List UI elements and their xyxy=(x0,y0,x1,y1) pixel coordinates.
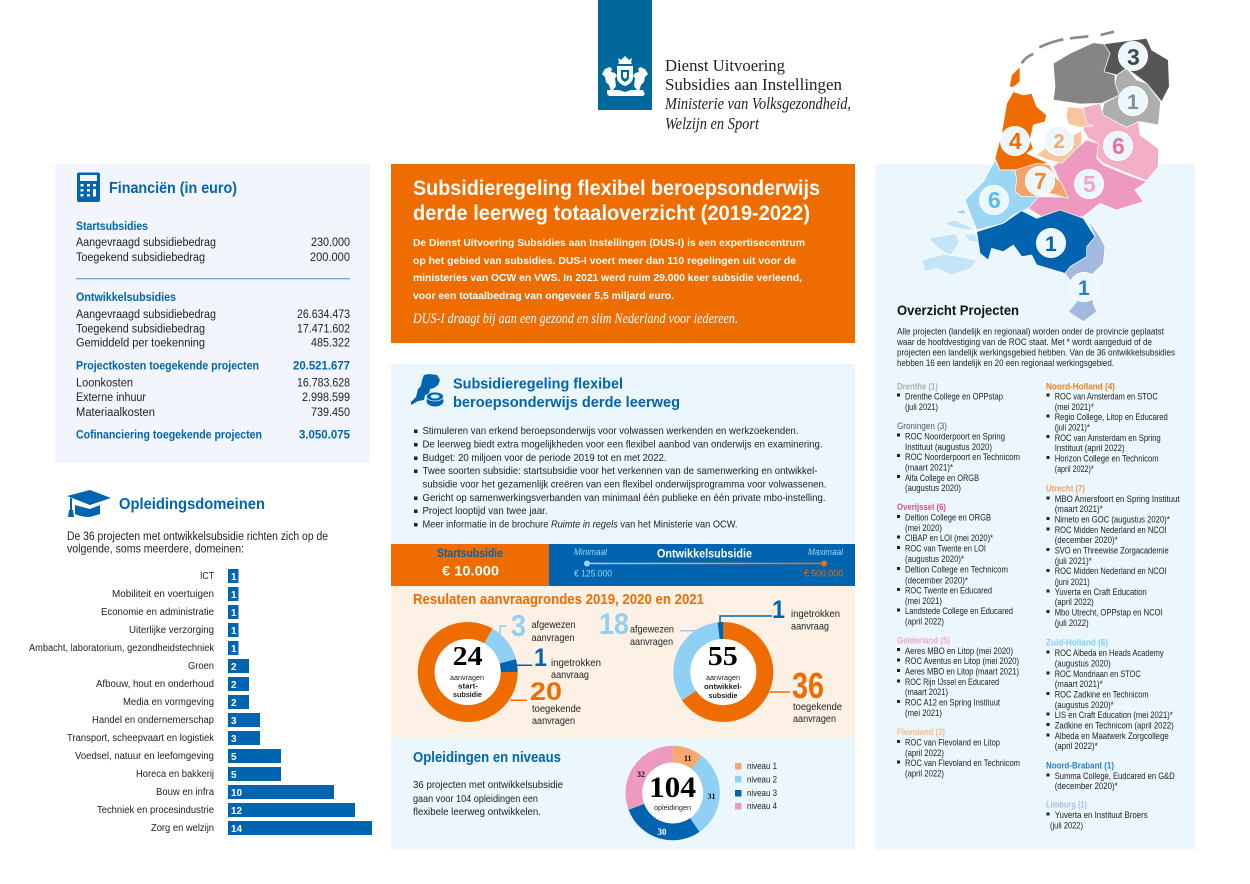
callout: 3 afgewezen: 3 xyxy=(511,608,526,643)
province: Friesland xyxy=(1053,43,1119,104)
project list column 1: Aeres MBO en Litop (mei 2020) xyxy=(905,646,1013,656)
bar chart: 2 xyxy=(231,680,237,691)
project list column 2: (juni 2021) xyxy=(1055,577,1090,587)
bar chart: ICT xyxy=(200,571,214,582)
table: ontwikkelsubsidies: 17.471.602 xyxy=(297,324,350,336)
table: ontwikkelsubsidies: Loonkosten xyxy=(76,378,133,390)
province: Noord-Brabant xyxy=(977,210,1095,273)
callout: 1 ingetrokken: 1 xyxy=(534,644,547,672)
ontwikkelsubsidie range: Ontwikkelsubsidie xyxy=(657,548,752,560)
callout: 18 afgewezen: 18 xyxy=(599,608,629,641)
province: Zuid-Holland xyxy=(955,160,1038,230)
body text xyxy=(413,779,563,818)
project list column 2: (april 2022)* xyxy=(1055,464,1094,474)
project list column 2: (augustus 2020) xyxy=(1055,658,1111,668)
bar chart: 1 xyxy=(231,644,237,655)
project list column 2: Limburg (1) xyxy=(1046,800,1087,810)
bar chart: 5 xyxy=(231,752,237,763)
project list column 1: (augustus 2020)* xyxy=(905,554,964,564)
project list column 2: Regio College, Litop en Educared xyxy=(1055,412,1168,422)
callout: 36 toegekend: 36 xyxy=(792,665,824,706)
callout: 20 toegekend: toegekende xyxy=(532,703,581,715)
project list column 1: (maart 2021) xyxy=(905,687,948,697)
bar chart: Ambacht, laboratorium, gezondheidstechniek xyxy=(29,643,215,654)
table: ontwikkelsubsidies xyxy=(76,292,351,442)
callout: 1 ingetrokken xyxy=(720,596,840,632)
overzicht intro text: projecten een landelijk werkingsgebied hebben. Van de 36 ontwikkelsubsidies xyxy=(897,348,1175,358)
project list column 2: LIS en Craft Education (mei 2021)* xyxy=(1055,710,1173,720)
intro paragraph: De Dienst Uitvoering Subsidies aan Instellingen (DUS-I) is een expertisecentrum xyxy=(413,237,805,249)
project list column 1: Landstede College en Educared xyxy=(905,606,1013,616)
donut: ontwikkelsubsidie: subsidie xyxy=(708,693,738,700)
donut: niveaus: 31 xyxy=(708,792,716,801)
main title: derde leerweg totaaloverzicht (2019-2022) xyxy=(413,201,810,225)
project list column 1: CIBAP en LOI (mei 2020)* xyxy=(905,533,993,543)
callout: 18 afgewezen xyxy=(599,608,697,648)
donut: niveaus: 104 xyxy=(649,771,696,804)
legend: niveau 1 xyxy=(747,761,777,771)
project list column 2: MBO Amersfoort en Spring Instituut xyxy=(1055,494,1180,504)
project list column 2: ROC Midden Nederland en NCOI xyxy=(1055,525,1167,535)
project list column 1: (april 2022) xyxy=(905,616,944,626)
bar chart: Mobiliteit en voertuigen xyxy=(112,589,214,600)
startsubsidie label: € 10.000 xyxy=(442,562,499,578)
bullet list: Gericht op samenwerkingsverbanden van minimaal één publieke en één private mbo-instelling. xyxy=(422,492,826,504)
table: startsubsidies: Aangevraagd subsidiebedrag xyxy=(76,237,216,249)
callout: 3 afgewezen xyxy=(500,608,576,644)
callout: 36 toegekend xyxy=(770,665,842,725)
bar chart: Zorg en welzijn xyxy=(151,823,214,834)
panel: regeling xyxy=(391,364,855,544)
donut: niveaus: 30 xyxy=(658,827,667,837)
bullets column 2 xyxy=(1046,394,1050,816)
project list column 1: Drenthe College en OPPstap xyxy=(905,392,1003,402)
table: startsubsidies xyxy=(76,221,350,264)
bullet list: De leerweg biedt extra mogelijkheden voor een flexibel aanbod van onderwijs en examinering. xyxy=(422,438,822,450)
bar chart: 5 xyxy=(231,770,237,781)
bar chart: 1 xyxy=(231,608,237,619)
callout: 18 afgewezen: afgewezen xyxy=(630,624,674,636)
donut: ontwikkelsubsidie: ontwikkel- xyxy=(704,684,743,691)
bar chart: 3 xyxy=(231,716,237,727)
bar chart: Media en vormgeving xyxy=(123,697,214,708)
project list column 2: (juli 2022) xyxy=(1055,618,1089,628)
callout: 1 ingetrokken: aanvraag xyxy=(791,620,829,632)
heading xyxy=(453,376,680,411)
donut: startsubsidie xyxy=(426,630,509,714)
project list column 2: Yuverta en Craft Education xyxy=(1055,587,1147,597)
bar chart xyxy=(29,569,372,835)
map of the Netherlands xyxy=(922,32,1169,322)
project list column 2: Noord-Brabant (1) xyxy=(1046,760,1114,770)
project list column 1: Deltion College en Technicom xyxy=(905,564,1008,574)
logo text: Dienst Uitvoering xyxy=(665,56,785,75)
overzicht intro text: waar de hoofdvestiging van de ROC staat. Met * wordt aangeduid of de xyxy=(896,337,1152,347)
project list column 2: (december 2020)* xyxy=(1055,535,1118,545)
bar chart: Horeca en bakkerij xyxy=(136,769,214,780)
project list column 2: ROC Zadkine en Technicom xyxy=(1055,690,1149,700)
bar chart: Handel en ondernemerschap xyxy=(92,715,214,726)
table: ontwikkelsubsidies: Externe inhuur xyxy=(76,392,146,404)
subsidy amounts bar xyxy=(391,544,855,586)
project list column 1: Aeres MBO en Litop (maart 2021) xyxy=(905,666,1019,676)
logo text: Subsidies aan Instellingen xyxy=(665,75,842,94)
table: ontwikkelsubsidies: Projectkosten toegekende projecten xyxy=(76,360,259,372)
donut: startsubsidie: aanvragen xyxy=(450,675,484,682)
callout: 20 toegekend: aanvragen xyxy=(532,715,575,727)
table: ontwikkelsubsidies: Cofinanciering toegekende projecten xyxy=(76,430,262,442)
panel: financien xyxy=(55,164,370,463)
intro paragraph: voor een totaalbedrag van ongeveer 5,5 miljard euro. xyxy=(413,290,674,302)
project list column 1: Groningen (3) xyxy=(897,421,947,431)
project list column 2: Instituut (april 2022) xyxy=(1055,443,1125,453)
panel: opleidingen en niveaus xyxy=(391,738,855,849)
intro text xyxy=(67,531,328,556)
project list column 2: Nimeto en GOC (augustus 2020)* xyxy=(1055,514,1170,524)
project list column 2: (april 2022) xyxy=(1055,597,1094,607)
province: Drenthe xyxy=(1102,68,1161,127)
project list column 1: ROC Rijn IJssel en Educared xyxy=(905,677,999,687)
project list column 2: SVO en Threewise Zorgacademie xyxy=(1055,546,1169,556)
map badges xyxy=(980,42,1148,302)
heading: Subsidieregeling flexibel xyxy=(453,376,623,392)
bar chart: Transport, scheepvaart en logistiek xyxy=(67,733,215,744)
bar chart: 1 xyxy=(231,590,237,601)
province: Utrecht xyxy=(1015,163,1068,198)
main title: Subsidieregeling flexibel beroepsonderwijs xyxy=(413,176,820,200)
slogan: DUS-I draagt bij aan een gezond en slim Nederland voor iedereen. xyxy=(412,311,738,327)
bar chart: Economie en administratie xyxy=(101,607,214,618)
overzicht intro text: Alle projecten (landelijk en regionaal) worden onder de provincie geplaatst xyxy=(897,326,1164,336)
bar chart: 3 xyxy=(231,734,237,745)
icon: coat of arms xyxy=(602,56,648,96)
ontwikkelsubsidie range: Maximaal xyxy=(808,547,844,558)
table: ontwikkelsubsidies: 26.634.473 xyxy=(297,309,350,321)
donut: startsubsidie: subsidie xyxy=(453,692,482,699)
project list column 1: ROC van Flevoland en Litop xyxy=(905,738,1000,748)
table: startsubsidies: Toegekend subsidiebedrag xyxy=(76,252,205,264)
bar chart: Voedsel, natuur en leefomgeving xyxy=(75,751,214,762)
bullet list: Budget: 20 miljoen voor de periode 2019 tot en met 2022. xyxy=(422,452,666,464)
intro paragraph xyxy=(413,237,805,302)
project list column 2: Summa College, Eudcared en G&D xyxy=(1055,771,1175,781)
map badges: 4 xyxy=(1009,128,1022,154)
project list column 1: Drenthe (1) xyxy=(897,381,938,391)
callout: 36 toegekend: aanvragen xyxy=(793,713,836,725)
project list column 1: (december 2020)* xyxy=(905,575,968,585)
panel: title xyxy=(391,164,855,343)
callout: 1 ingetrokken: ingetrokken xyxy=(551,657,601,669)
icon: netherlands with coins xyxy=(411,374,444,406)
project list column 1: ROC Noorderpoort en Spring xyxy=(905,432,1005,442)
province: Zeeland xyxy=(922,220,978,275)
bar chart: 2 xyxy=(231,662,237,673)
project list column 2: Zuid-Holland (6) xyxy=(1046,638,1108,648)
ontwikkelsubsidie range xyxy=(574,547,844,578)
bar chart: 2 xyxy=(231,698,237,709)
project list column 2: Horizon College en Technicom xyxy=(1055,454,1159,464)
project list column 1: (juli 2021) xyxy=(905,402,938,412)
intro paragraph: ministeries van OCW en VWS. In 2021 werd ruim 29.000 keer subsidie verleend, xyxy=(413,272,802,284)
intro text: volgende, soms meerdere, domeinen: xyxy=(67,544,244,556)
heading: Opleidingsdomeinen xyxy=(119,496,265,513)
project list column 1: ROC van Twente en LOI xyxy=(905,544,986,554)
province: Flevoland xyxy=(1037,107,1093,163)
map badges: 1 xyxy=(1127,91,1139,114)
map badges: 2 xyxy=(1054,131,1065,153)
donut: ontwikkelsubsidie xyxy=(682,630,765,714)
project list column 1: (mei 2021) xyxy=(905,596,942,606)
logo text: Ministerie van Volksgezondheid, xyxy=(664,94,851,113)
project list column 1: Overijssel (6) xyxy=(897,502,946,512)
map badges: 7 xyxy=(1034,168,1047,194)
project list column 1: (mei 2021) xyxy=(905,708,942,718)
project list column 2: Utrecht (7) xyxy=(1046,484,1085,494)
project list column 2: (juli 2021)* xyxy=(1055,422,1090,432)
callout: 1 ingetrokken: ingetrokken xyxy=(791,608,840,620)
intro text: De 36 projecten met ontwikkelsubsidie richten zich op de xyxy=(67,531,328,543)
header logo xyxy=(598,0,851,133)
project list column 1: ROC van Flevoland en Technicom xyxy=(905,758,1020,768)
donut: startsubsidie: 24 xyxy=(453,641,483,671)
logo blue ribbon xyxy=(598,0,652,110)
callout: 36 toegekend: toegekende xyxy=(793,701,842,713)
callout: 1 ingetrokken: aanvraag xyxy=(551,669,589,681)
donut: niveaus: 11 xyxy=(684,754,692,763)
heading: Resulaten aanvraagrondes 2019, 2020 en 2021 xyxy=(413,592,704,608)
heading: beroepsonderwijs derde leerweg xyxy=(453,394,680,411)
project list column 2: (maart 2021)* xyxy=(1055,504,1103,514)
callout: 1 ingetrokken xyxy=(517,644,601,681)
callout: 20 toegekend: 20 xyxy=(530,678,562,706)
legend: niveau 4 xyxy=(747,801,777,811)
donut: startsubsidie: start- xyxy=(458,684,479,690)
body text: 36 projecten met ontwikkelsubsidie xyxy=(413,779,563,791)
table: ontwikkelsubsidies: Gemiddeld per toekenning xyxy=(76,338,205,350)
bar chart: Bouw en infra xyxy=(156,787,214,798)
map badges: 3 xyxy=(1127,44,1140,70)
legend: niveau 3 xyxy=(747,788,777,798)
bar chart: 10 xyxy=(231,788,243,799)
panel: overzicht background xyxy=(875,164,1195,849)
project list column 2: (juli 2021)* xyxy=(1055,556,1092,566)
project list column 2: (augustus 2020)* xyxy=(1055,700,1114,710)
project list column 2 xyxy=(1046,381,1180,830)
project list column 2: (juli 2022) xyxy=(1050,820,1083,830)
project list column 1 xyxy=(897,381,1020,778)
ontwikkelsubsidie range: € 500.000 xyxy=(804,568,843,578)
bullet list: Stimuleren van erkend beroepsonderwijs voor volwassen werkenden en werkzoekenden. xyxy=(422,425,798,437)
project list column 2: ROC Midden Nederland en NCOI xyxy=(1055,566,1167,576)
project list column 1: Instituut (augustus 2020) xyxy=(905,442,992,452)
legend: niveau 2 xyxy=(747,774,777,784)
project list column 2: Albeda en Maatwerk Zorgcollege xyxy=(1055,731,1169,741)
project list column 2: ROC Albeda en Heads Academy xyxy=(1055,648,1164,658)
bar chart: 14 xyxy=(231,824,243,835)
project list column 2: ROC Mondriaan en STOC xyxy=(1055,669,1141,679)
project list column 2: Yuverta en Instituut Broers xyxy=(1055,810,1148,820)
icon: graduation cap xyxy=(67,490,111,517)
bar chart: Techniek en procesindustrie xyxy=(97,805,214,816)
province: Overijssel xyxy=(1083,103,1158,181)
ontwikkelsubsidie range: Minimaal xyxy=(574,547,608,558)
section: opleidingsdomeinen xyxy=(29,490,372,835)
map badges: 1 xyxy=(1045,233,1057,256)
map badges: 1 xyxy=(1078,277,1090,300)
table: ontwikkelsubsidies: 2.998.599 xyxy=(302,392,350,404)
project list column 1: (maart 2021)* xyxy=(905,462,953,472)
bullet list: subsidie voor het gezamenlijk creëren van een flexibel onderwijsprogramma voor volwassenen. xyxy=(422,478,826,490)
project list column 1: ROC A12 en Spring Instituut xyxy=(905,698,1000,708)
project list column 1: (april 2022) xyxy=(905,748,944,758)
project list column 1: (mei 2020) xyxy=(905,523,942,533)
bullet list xyxy=(414,425,826,530)
table: ontwikkelsubsidies: Toegekend subsidiebedrag xyxy=(76,324,205,336)
project list column 2: (maart 2021)* xyxy=(1055,679,1103,689)
province: Groningen xyxy=(1104,38,1169,102)
callout: 3 afgewezen: aanvragen xyxy=(532,632,575,644)
bullet list: Twee soorten subsidie: startsubsidie voor het verkennen van de samenwerking en ontwikkel- xyxy=(422,465,818,477)
bar chart: 12 xyxy=(231,806,243,817)
bullets column 1 xyxy=(897,394,900,764)
donut: ontwikkelsubsidie: aanvragen xyxy=(706,675,740,682)
table: ontwikkelsubsidies: 739.450 xyxy=(311,407,350,419)
panel: resultaten xyxy=(391,586,855,738)
overzicht intro text xyxy=(896,326,1175,368)
startsubsidie label: Startsubsidie xyxy=(437,548,503,560)
logo text: Welzijn en Sport xyxy=(665,114,760,133)
table: ontwikkelsubsidies: 3.050.075 xyxy=(299,430,351,442)
province: Noord-Holland xyxy=(995,67,1048,170)
heading: Financiën (in euro) xyxy=(109,180,237,197)
project list column 1: (april 2022) xyxy=(905,768,944,778)
intro paragraph: op het gebied van subsidies. DUS-I voert meer dan 110 regelingen uit voor de xyxy=(413,255,796,267)
icon: calculator xyxy=(77,172,100,202)
bar chart: Groen xyxy=(188,661,214,672)
project list column 2: (april 2022)* xyxy=(1055,741,1098,751)
overzicht projecten heading: Overzicht Projecten xyxy=(897,302,1019,318)
table: startsubsidies: 200.000 xyxy=(310,252,350,264)
heading: Opleidingen en niveaus xyxy=(413,750,561,766)
project list column 1: Alfa College en ORGB xyxy=(905,473,979,483)
map badges: 6 xyxy=(1112,133,1125,159)
project list column 2: ROC van Amsterdam en Spring xyxy=(1055,433,1161,443)
project list column 1: Flevoland (2) xyxy=(897,727,945,737)
project list column 2: ROC van Amsterdam en STOC xyxy=(1055,392,1158,402)
project list column 1: Deltion College en ORGB xyxy=(905,512,991,522)
project list column 2: (december 2020)* xyxy=(1055,781,1118,791)
project list column 1: ROC Twente en Educared xyxy=(905,585,992,595)
bar chart: Afbouw, hout en onderhoud xyxy=(96,679,214,690)
ontwikkelsubsidie range: € 125.000 xyxy=(574,568,612,578)
table: ontwikkelsubsidies: 485.322 xyxy=(311,338,350,350)
project list column 1: ROC Noorderpoort en Technicom xyxy=(905,452,1020,462)
project list column 2: Zadkine en Technicom (april 2022) xyxy=(1055,720,1174,730)
main title xyxy=(413,176,820,225)
body text: flexibele leerweg ontwikkelen. xyxy=(413,806,541,818)
wadden islands xyxy=(1022,32,1114,63)
table: ontwikkelsubsidies: Ontwikkelsubsidies xyxy=(76,292,176,304)
overzicht intro text: hebben 16 een landelijk en 20 een regionaal werkingsgebied. xyxy=(897,358,1114,368)
legend xyxy=(735,761,777,811)
project list column 1: ROC Aventus en Litop (mei 2020) xyxy=(905,656,1019,666)
table: startsubsidies: 230.000 xyxy=(311,237,350,249)
donut: niveaus: opleidingen xyxy=(654,803,691,812)
callout: 3 afgewezen: afgewezen xyxy=(532,619,576,631)
bar chart: Uiterlijke verzorging xyxy=(129,625,214,636)
donut: niveaus xyxy=(634,754,716,837)
province: Limburg xyxy=(1065,218,1105,322)
province: Gelderland xyxy=(1028,140,1147,220)
logo text xyxy=(664,56,851,133)
project list column 1: (augustus 2020) xyxy=(905,483,961,493)
project list column 2: (mei 2021)* xyxy=(1055,402,1094,412)
bullet list: Meer informatie in de brochure Ruimte in regels van het Ministerie van OCW. xyxy=(422,518,737,530)
bar chart: 1 xyxy=(231,626,237,637)
table: ontwikkelsubsidies: Materiaalkosten xyxy=(76,407,155,419)
map badges: 5 xyxy=(1083,171,1096,197)
map badges: 6 xyxy=(988,187,1001,213)
table: ontwikkelsubsidies: Aangevraagd subsidiebedrag xyxy=(76,309,216,321)
bullet list: Project looptijd van twee jaar. xyxy=(422,505,548,517)
startsubsidie label xyxy=(437,548,503,578)
table: ontwikkelsubsidies: 20.521.677 xyxy=(293,360,350,372)
project list column 1: Gelderland (5) xyxy=(897,635,950,645)
callout: 18 afgewezen: aanvragen xyxy=(630,636,673,648)
project list column 2: Mbo Utrecht, OPPstap en NCOI xyxy=(1055,608,1163,618)
table: ontwikkelsubsidies: 16.783.628 xyxy=(297,378,350,390)
bar chart: 1 xyxy=(231,572,237,583)
table: startsubsidies: Startsubsidies xyxy=(76,221,148,233)
project list column 2: Noord-Holland (4) xyxy=(1046,381,1115,391)
body text: gaan voor 104 opleidingen een xyxy=(413,793,538,805)
donut: niveaus: 32 xyxy=(637,770,645,779)
callout: 1 ingetrokken: 1 xyxy=(772,596,785,624)
callout: 20 toegekend xyxy=(510,678,581,727)
donut: ontwikkelsubsidie: 55 xyxy=(708,641,738,671)
